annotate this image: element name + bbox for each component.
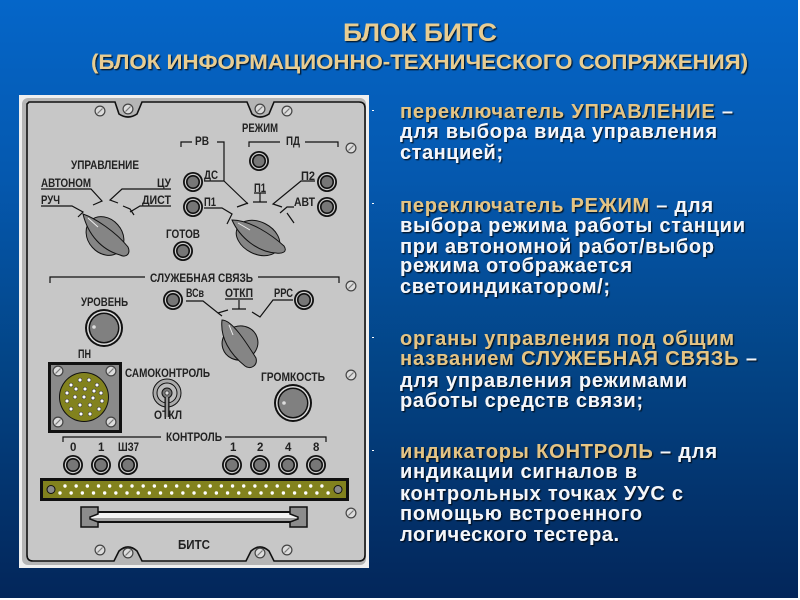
panel labels: 4 <box>285 442 292 454</box>
panel labels: УРОВЕНЬ <box>81 297 128 309</box>
title: БЛОК БИТС <box>343 19 497 47</box>
block: mode switch: при автономной работ/выбор <box>400 236 714 258</box>
panel labels: ГРОМКОСТЬ <box>261 372 325 384</box>
panel labels: ВСв <box>186 288 204 300</box>
panel labels: КОНТРОЛЬ <box>166 432 222 444</box>
block: mode switch: выбора режима работы станции <box>400 215 745 237</box>
block: control switch: станцией; <box>400 142 503 164</box>
title: (БЛОК ИНФОРМАЦИОННО-ТЕХНИЧЕСКОГО СОПРЯЖЕНИЯ) <box>91 51 748 74</box>
block: service communication: органы управления под общим <box>400 328 734 350</box>
block: control switch: для выбора вида управления <box>400 121 717 143</box>
panel labels: ШЗ7 <box>118 442 139 454</box>
panel labels <box>41 123 325 552</box>
block: mode switch: переключатель РЕЖИМ – для <box>400 195 713 217</box>
block: control switch: переключатель УПРАВЛЕНИЕ – <box>400 101 733 123</box>
panel labels: ПН <box>78 349 91 361</box>
panel labels: П1 <box>254 183 266 195</box>
rotary switch: service communication <box>218 320 262 368</box>
panel labels: 2 <box>257 442 263 454</box>
panel labels: ДС <box>204 170 218 182</box>
panel labels: ДИСТ <box>142 195 171 207</box>
panel labels: АВТОНОМ <box>41 178 91 190</box>
rotary switch: mode <box>230 213 286 263</box>
panel labels: РВ <box>195 136 209 148</box>
mounting screws <box>94 104 356 558</box>
panel: BITS unit front panel <box>19 95 369 568</box>
block: control switch <box>400 101 733 164</box>
block: service communication: названием СЛУЖЕБНАЯ СВЯЗЬ – <box>400 348 757 370</box>
block: control indicators: контрольных точках УУС с <box>400 483 683 505</box>
bullet markers <box>372 110 374 451</box>
control section wiring <box>41 142 339 442</box>
connector strip <box>40 478 349 501</box>
panel labels: ЦУ <box>157 178 172 190</box>
panel labels: БИТС <box>178 537 211 552</box>
panel labels: УПРАВЛЕНИЕ <box>71 160 139 172</box>
panel labels: ОТКП <box>225 288 253 300</box>
block: mode switch: светоиндикатором/; <box>400 276 610 298</box>
panel labels: АВТ <box>294 197 315 209</box>
panel labels: 1 <box>98 442 105 454</box>
panel labels: ГОТОВ <box>166 229 200 241</box>
block: control indicators: индикаторы КОНТРОЛЬ – для <box>400 441 717 463</box>
panel labels: ПД <box>286 136 300 148</box>
block: service communication: работы средств связи; <box>400 390 643 412</box>
panel body <box>19 95 369 568</box>
knob: level <box>85 309 123 347</box>
block: service communication: для управления режимами <box>400 370 687 392</box>
block: control indicators: логического тестера. <box>400 524 619 546</box>
panel labels: П2 <box>301 171 315 183</box>
panel labels: РРС <box>274 288 293 300</box>
panel labels: РЕЖИМ <box>242 123 278 135</box>
handle <box>81 507 307 527</box>
indicator lamps <box>163 151 337 310</box>
panel labels: 0 <box>70 442 76 454</box>
block: control indicators: индикации сигналов в <box>400 461 637 483</box>
block: mode switch <box>400 195 745 298</box>
block: mode switch: режима отображается <box>400 255 632 277</box>
block: service communication <box>400 328 757 412</box>
panel labels: РУЧ <box>41 195 60 207</box>
toggle switch: self-test <box>153 379 181 417</box>
description text <box>400 101 757 546</box>
panel labels: 1 <box>230 442 237 454</box>
panel labels: 8 <box>313 442 320 454</box>
panel labels: ОТКЛ <box>154 410 182 422</box>
block: control indicators <box>400 441 717 546</box>
panel labels: СЛУЖЕБНАЯ СВЯЗЬ <box>150 273 253 285</box>
block: control indicators: помощью встроенного <box>400 503 642 525</box>
rotary switch: control mode <box>78 209 132 263</box>
control indicator lamps <box>63 455 326 475</box>
connector PN <box>48 362 122 433</box>
panel labels: САМОКОНТРОЛЬ <box>125 368 210 380</box>
panel labels: П1 <box>204 197 216 209</box>
knob: volume <box>274 384 312 422</box>
title <box>91 19 748 74</box>
